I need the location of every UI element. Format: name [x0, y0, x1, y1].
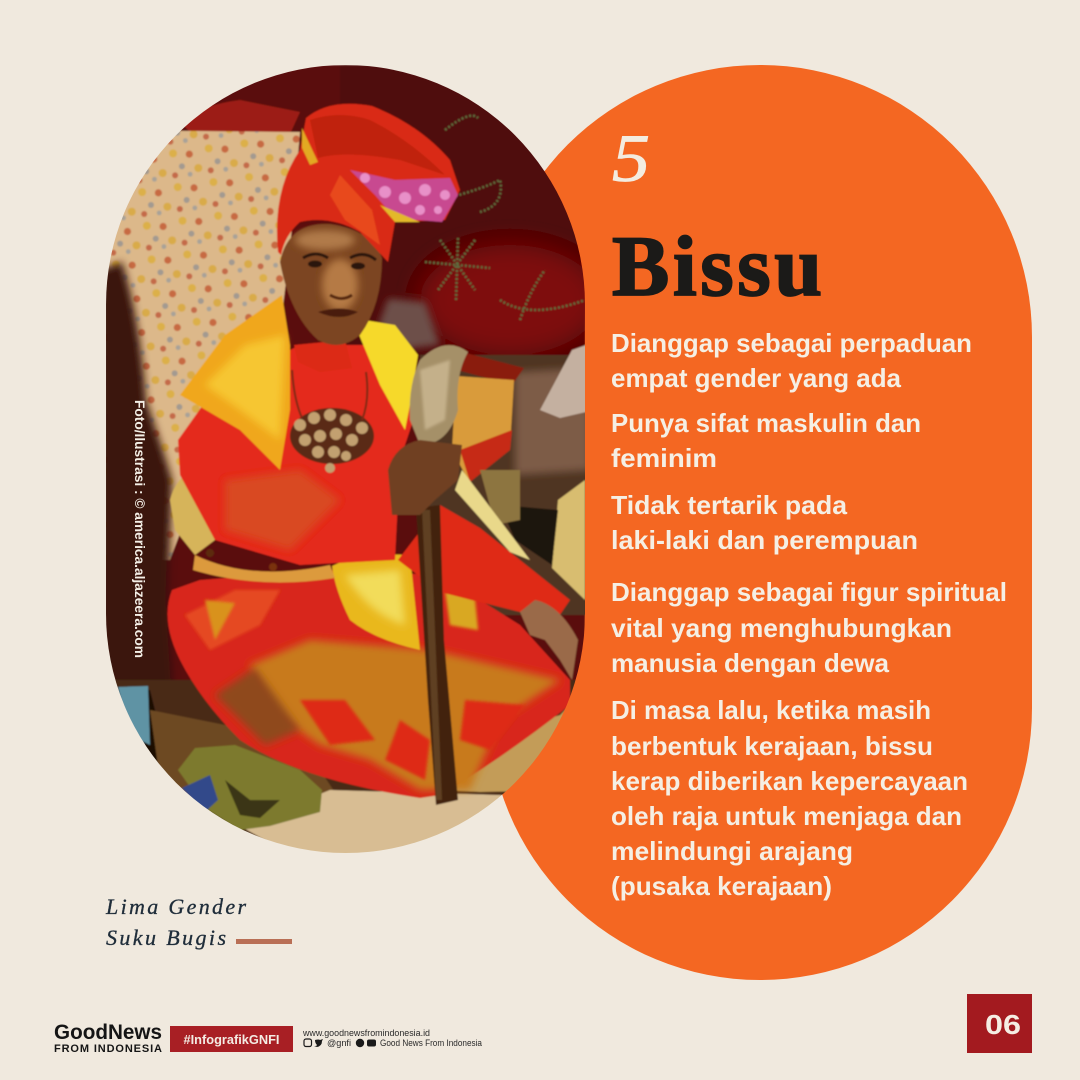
heading: Bissu: Bissu	[612, 218, 826, 314]
text block: description bullets	[611, 328, 1007, 901]
social links: www.goodnewsfromindonesia.id	[302, 1028, 430, 1038]
photo sub-element: red collar	[293, 341, 347, 348]
icon: facebook	[356, 1039, 364, 1047]
photo sub-element: robe and arms	[170, 345, 570, 622]
text block: description bullets: kerap diberikan kepercayaan	[611, 766, 968, 796]
caption: series title: Lima Gender	[105, 894, 246, 919]
logo: GoodNews From Indonesia	[54, 1021, 162, 1055]
photo sub-element: floral cloth	[100, 130, 440, 560]
social links: Good News From Indonesia	[380, 1038, 482, 1048]
text block: description bullets: oleh raja untuk menjaga dan	[611, 801, 962, 831]
text block: description bullets: vital yang menghubungkan	[611, 613, 952, 643]
number 5: 5	[612, 120, 650, 196]
photo sub-element: face	[280, 224, 382, 345]
photo sub-element: hands	[388, 440, 578, 680]
panel: orange stadium	[488, 65, 1032, 980]
social links: @gnfi	[327, 1038, 351, 1048]
logo: GoodNews From Indonesia: FROM INDONESIA	[54, 1043, 162, 1055]
photo sub-element: staff	[410, 345, 468, 805]
hashtag tag: #InfografikGNFI	[184, 1033, 280, 1047]
photo sub-element: dark red drapery	[180, 65, 600, 375]
caption accent line	[236, 939, 292, 944]
text block: description bullets: Dianggap sebagai perpaduan	[611, 328, 972, 358]
page number	[967, 994, 1032, 1053]
caption: series title: Suku Bugis	[106, 925, 226, 950]
social links	[302, 1028, 482, 1048]
text block: description bullets: Dianggap sebagai figur spiritual	[611, 577, 1007, 607]
photo sub-element: yellow shawl	[180, 295, 418, 470]
caption: series title	[105, 894, 246, 950]
text block: description bullets: Di masa lalu, ketika masih	[611, 695, 931, 725]
text block: description bullets: laki-laki dan perempuan	[611, 525, 918, 555]
hashtag tag	[170, 1026, 293, 1052]
photo sub-element: floor	[106, 680, 585, 860]
photo sub-element: skirt	[168, 554, 570, 798]
photo sub-element: necklace	[290, 370, 374, 473]
photo: bissu figure	[100, 65, 600, 860]
icon: youtube	[367, 1040, 376, 1046]
photo sub-element: olive cloth	[178, 745, 322, 830]
text block: description bullets: melindungi arajang	[611, 836, 853, 866]
photo credit: Foto/Ilustrasi : © america.aljazeera.com	[132, 400, 147, 658]
page number: 06	[985, 1009, 1021, 1040]
photo sub-element: lower right clutter	[420, 345, 590, 615]
photo sub-element: turban	[277, 104, 460, 262]
text block: description bullets: empat gender yang ada	[611, 363, 902, 393]
text block: description bullets: (pusaka kerajaan)	[611, 871, 832, 901]
text block: description bullets: Tidak tertarik pada	[611, 490, 848, 520]
icon: instagram	[304, 1039, 312, 1046]
text block: description bullets: manusia dengan dewa	[611, 648, 890, 678]
logo: GoodNews From Indonesia: GoodNews	[54, 1021, 162, 1044]
icon: twitter	[314, 1039, 323, 1047]
text block: description bullets: feminim	[611, 443, 717, 473]
text block: description bullets: Punya sifat maskulin dan	[611, 408, 921, 438]
photo sub-element: left shadow	[100, 262, 175, 710]
text block: description bullets: berbentuk kerajaan, bissu	[611, 731, 933, 761]
